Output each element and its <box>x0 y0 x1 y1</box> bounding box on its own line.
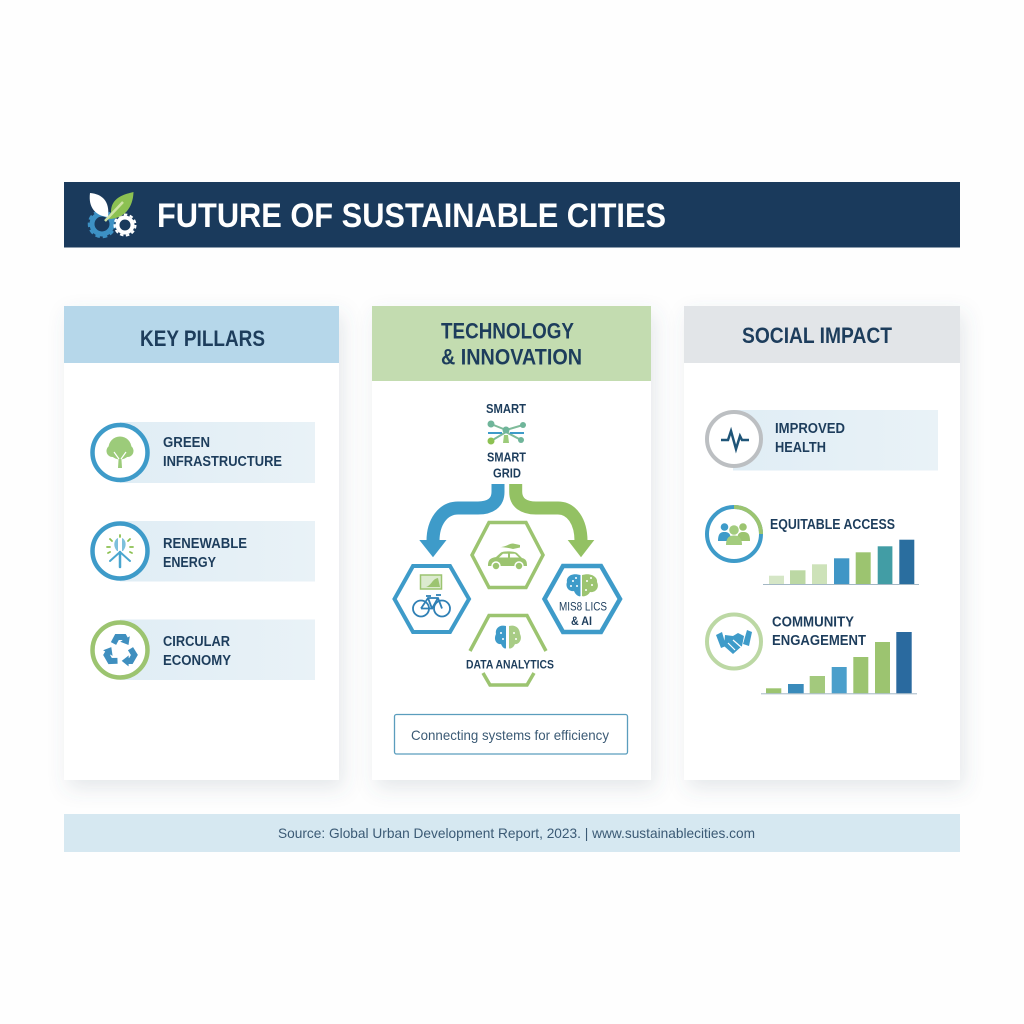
arrow: blue to left <box>419 484 498 557</box>
caption box: Connecting systems for efficiency <box>411 727 609 743</box>
label: smart grid <box>487 450 526 480</box>
source footer <box>64 814 960 852</box>
item: circular economy <box>92 620 315 680</box>
item: renewable energy: RENEWABLE <box>163 536 247 552</box>
title text: FUTURE OF SUSTAINABLE CITIES <box>157 197 666 235</box>
icon: wind turbine <box>107 535 133 567</box>
heading: social impact <box>684 306 960 363</box>
caption box <box>394 714 628 754</box>
icon: brain <box>495 626 521 649</box>
bar chart: community engagement <box>761 632 917 694</box>
icon: recycling arrows <box>103 636 137 666</box>
label: robotics and AI: MIS8 LICS <box>559 602 607 614</box>
item: circular economy: ECONOMY <box>163 653 231 669</box>
item: green infrastructure: GREEN <box>163 435 210 451</box>
item: circular economy: CIRCULAR <box>163 634 230 650</box>
label: smart grid: GRID <box>493 466 521 480</box>
icon: handshake <box>716 630 752 654</box>
label: data analytics: DATA ANALYTICS <box>466 658 554 672</box>
label: robotics and AI <box>559 602 607 628</box>
heading: key pillars: KEY PILLARS <box>140 326 265 351</box>
hexagon: cycling <box>394 566 469 632</box>
item: green infrastructure <box>92 422 315 483</box>
heading: technology and innovation <box>372 306 651 381</box>
heading: social impact: SOCIAL IMPACT <box>742 323 892 348</box>
item: equitable access <box>707 507 895 561</box>
icon: brain <box>566 574 598 596</box>
hexagon: robotics and AI <box>544 566 620 632</box>
hexagon: data analytics <box>466 616 554 685</box>
title banner <box>64 182 960 248</box>
label: smart: SMART <box>486 401 526 416</box>
arrow: green to right <box>516 484 594 557</box>
icon: people <box>718 523 750 545</box>
heading: technology and innovation: TECHNOLOGY <box>441 318 574 344</box>
label: robotics and AI: & AI <box>571 616 592 628</box>
icon: bicycle <box>413 595 450 616</box>
item: community engagement: ENGAGEMENT <box>772 633 866 649</box>
bar chart: equitable access <box>763 540 919 585</box>
item: renewable energy <box>92 521 315 582</box>
icon: tree <box>106 436 134 468</box>
panel: technology and innovation <box>372 306 651 780</box>
item: improved health: IMPROVED <box>775 421 845 437</box>
item: community engagement: COMMUNITY <box>772 614 854 630</box>
panel: key pillars <box>64 306 339 780</box>
icon: smart grid network <box>488 420 526 444</box>
item: equitable access: EQUITABLE ACCESS <box>770 517 895 533</box>
icon: electric car <box>488 544 527 570</box>
item: improved health: HEALTH <box>775 440 826 456</box>
icon: leaves and gears logo <box>89 192 136 237</box>
icon: heartbeat <box>721 431 749 449</box>
item: improved health <box>707 410 938 470</box>
icon: map image <box>420 575 442 589</box>
heading: key pillars <box>64 306 339 363</box>
item: community engagement <box>707 614 866 668</box>
hexagon: electric vehicle <box>472 522 543 588</box>
label: smart grid: SMART <box>487 450 526 464</box>
item: renewable energy: ENERGY <box>163 555 216 571</box>
source footer: Source: Global Urban Development Report, 2023. | www.sustainablecities.com <box>278 825 755 841</box>
heading: technology and innovation: & INNOVATION <box>441 344 582 370</box>
panel: social impact <box>684 306 960 780</box>
item: green infrastructure: INFRASTRUCTURE <box>163 454 282 470</box>
